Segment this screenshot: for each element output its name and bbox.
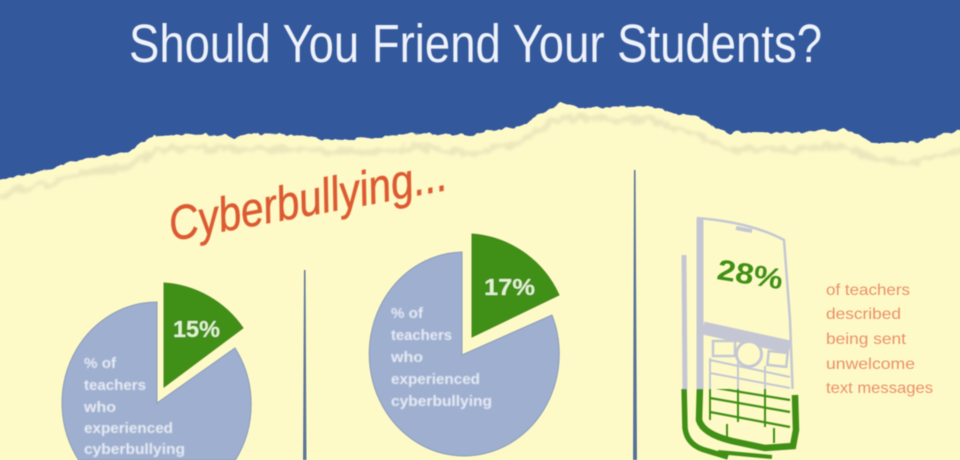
title: Should You Friend Your Students? — [129, 14, 822, 74]
pie label 1: cyberbullying — [84, 442, 185, 458]
pie label 2: cyberbullying — [391, 393, 492, 410]
pie label 2: who — [390, 349, 423, 366]
pie label 1: teachers — [84, 378, 146, 394]
phone outline upper, grey — [684, 218, 793, 400]
pie slice: 17% — [472, 234, 559, 337]
pie chart 2 — [369, 234, 559, 456]
pie label 1: % of — [84, 356, 116, 372]
label: 15%: 15% — [173, 316, 220, 342]
heading: Cyberbullying: Cyberbullying... — [164, 148, 451, 252]
pie chart 1 — [62, 283, 251, 460]
text block: unwelcome text messages: described — [826, 306, 901, 323]
pie label 2: teachers — [391, 327, 452, 344]
text block: unwelcome text messages: unwelcome — [826, 356, 915, 373]
divider right — [633, 170, 637, 460]
pie label 2 — [390, 305, 492, 410]
pie label 1: who — [83, 400, 116, 416]
pie slice: remainder — [369, 252, 559, 456]
pie label 1: experienced — [84, 421, 173, 437]
pie slice: remainder — [62, 302, 251, 460]
pie label 2: % of — [391, 305, 424, 322]
label: 28%: 28% — [715, 254, 785, 296]
text block: unwelcome text messages: of teachers — [826, 282, 910, 299]
label: 17%: 17% — [484, 274, 535, 300]
text block: unwelcome text messages: being sent — [826, 331, 907, 348]
pie label 2: experienced — [391, 371, 480, 388]
pie slice: 15% — [164, 283, 243, 387]
torn paper panel — [0, 104, 960, 456]
pie label 1 — [83, 356, 185, 458]
divider left — [303, 270, 306, 460]
text block: unwelcome text messages: text messages — [826, 380, 933, 397]
text block: unwelcome text messages — [826, 282, 933, 397]
background: blue banner — [0, 0, 960, 200]
icon: phone — [684, 218, 796, 457]
phone outline lower, green — [684, 385, 796, 457]
paper tear shading — [0, 118, 960, 200]
